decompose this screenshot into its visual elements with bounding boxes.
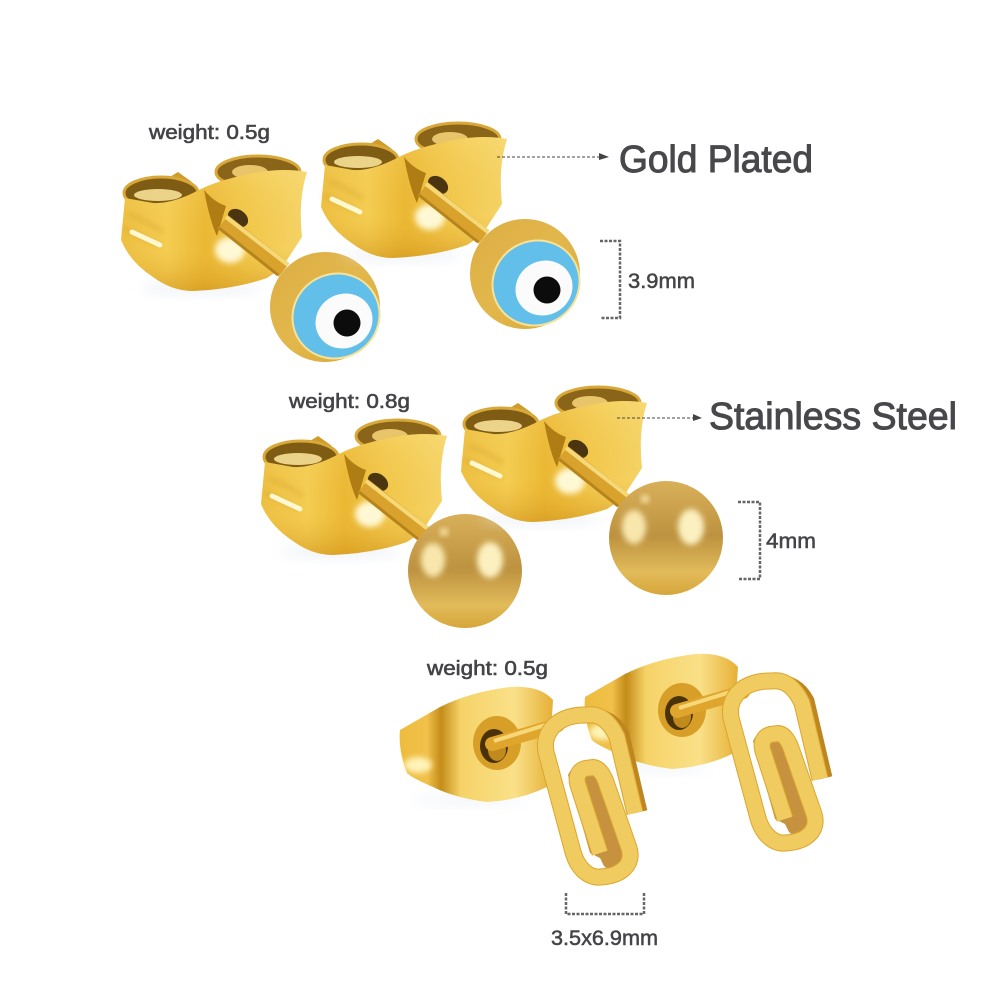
- dimension bracket: 3.5x6.9mm: [566, 893, 644, 914]
- dimension text: 3.5x6.9mm: 3.5x6.9mm: [551, 927, 658, 950]
- evil eye stud left: [270, 252, 396, 376]
- earring back left: [121, 156, 307, 294]
- ball stud right: [609, 481, 723, 595]
- weight label 2: weight: 0.8g: [288, 391, 410, 413]
- heading: gold plated: Gold Plated: [619, 139, 813, 181]
- earring pair: gold ball: [261, 387, 723, 628]
- paperclip stud left: [545, 715, 640, 877]
- evil eye stud right: [470, 219, 596, 343]
- earring back left: [400, 687, 558, 805]
- weight label 1: weight: 0.5g: [148, 122, 270, 144]
- paperclip stud right: [730, 681, 825, 843]
- earring back left: [261, 420, 447, 558]
- dimension bracket: 3.9mm: [600, 241, 620, 318]
- earring pair: paperclip: [400, 654, 825, 877]
- earring back right: [585, 654, 743, 772]
- ball stud left: [408, 514, 522, 628]
- earring back right: [461, 387, 647, 525]
- dimension text: 3.9mm: 3.9mm: [628, 270, 695, 293]
- dimension text: 4mm: 4mm: [766, 530, 816, 553]
- arrow: stainless steel: [617, 414, 702, 421]
- earring pair: evil eye: [121, 123, 596, 376]
- weight label 3: weight: 0.5g: [426, 658, 548, 680]
- dimension bracket: 4mm: [738, 502, 760, 579]
- arrow: gold plated: [497, 153, 609, 160]
- earring back right: [321, 123, 507, 261]
- heading: stainless steel: Stainless Steel: [709, 396, 957, 438]
